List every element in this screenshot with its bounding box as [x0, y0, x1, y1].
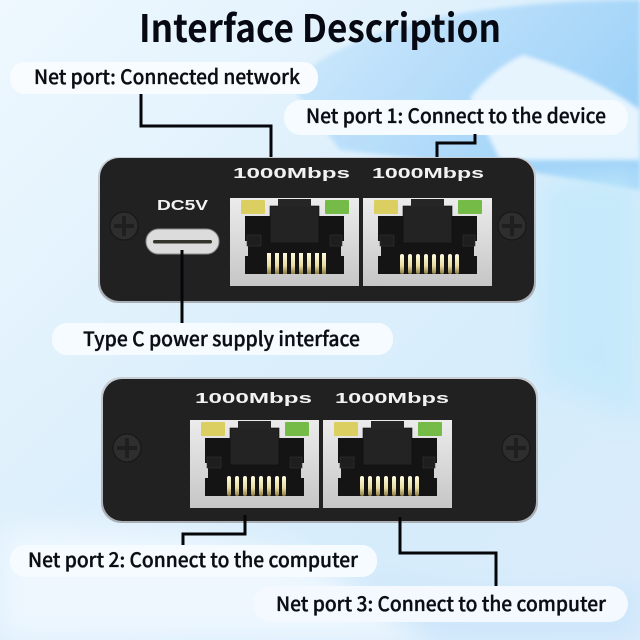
icon: right screw: [502, 434, 530, 462]
DC5V label: DC5V: [157, 197, 208, 214]
callout: net port 1: Net port 1: Connect to the device: [306, 100, 606, 129]
callout: net port 3: Net port 3: Connect to the computer: [276, 588, 607, 617]
icon: left screw: [113, 434, 141, 462]
icon: network port: [230, 198, 359, 286]
connector: net port 2: [183, 515, 245, 545]
speed label port 3: 1000Mbps: [335, 390, 449, 407]
callout: net port network: Net port: Connected network: [34, 61, 300, 90]
connector: net port to network port: [141, 94, 271, 157]
icon: port 1: [363, 198, 492, 286]
icon: port 2: [190, 420, 319, 508]
connector: net port 3: [400, 517, 496, 586]
icon: left screw: [110, 212, 138, 240]
callout: type C: Type C power supply interface: [83, 323, 360, 352]
panel: bottom device face: [101, 377, 538, 523]
icon: port 3: [323, 420, 452, 508]
connector: net port 1 to device port: [437, 134, 475, 157]
speed label port 0: 1000Mbps: [233, 165, 350, 182]
icon: type C port: [146, 229, 219, 254]
speed label port 2: 1000Mbps: [195, 390, 312, 407]
speed label port 1: 1000Mbps: [372, 165, 484, 182]
icon: right screw: [498, 212, 526, 240]
panel: top device face: [98, 157, 536, 303]
connector: type C power supply: [180, 250, 184, 323]
callout: net port 2: Net port 2: Connect to the computer: [28, 544, 359, 573]
